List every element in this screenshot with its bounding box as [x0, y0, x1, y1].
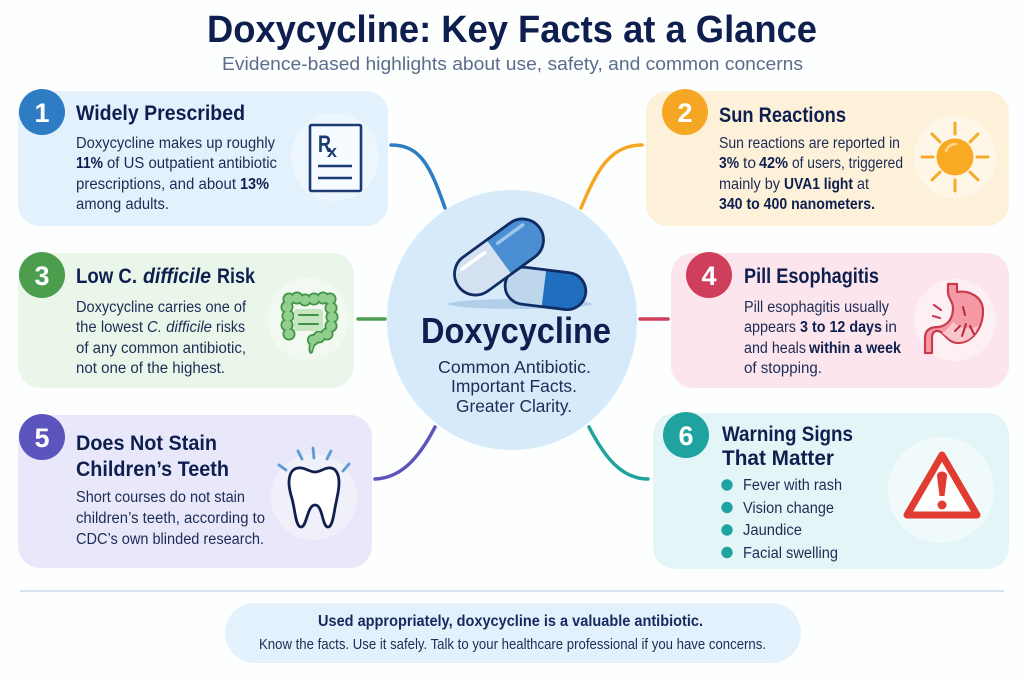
body text: appears	[744, 319, 796, 336]
body text: CDC’s own blinded research.	[76, 531, 264, 548]
icon: capsules	[446, 211, 592, 312]
panel: low C. difficile risk	[18, 252, 354, 388]
body text: in	[885, 319, 897, 336]
body text: C. difficile	[147, 319, 212, 336]
connector: card 3 to centre	[358, 317, 385, 321]
badge 3: 3	[34, 261, 50, 291]
body text: of stopping.	[744, 360, 822, 377]
subtitle: Evidence-based highlights about use, safety, and common concerns	[222, 53, 803, 74]
warning list: Jaundice	[743, 522, 802, 539]
connector: card 1 to centre	[391, 145, 445, 208]
heading	[76, 265, 255, 288]
heading: Warning Signs	[722, 423, 853, 446]
connector: card 2 to centre	[581, 145, 642, 208]
body text: Short courses do not stain	[76, 489, 245, 506]
body text: not one of the highest.	[76, 360, 225, 377]
badge 3	[19, 252, 65, 298]
body text: UVA1 light	[784, 176, 853, 193]
heading	[76, 432, 229, 481]
heading: Does Not Stain	[76, 432, 217, 455]
badge 1	[19, 89, 65, 135]
warning list: Fever with rash	[743, 477, 842, 494]
body text	[719, 135, 903, 213]
heading: Children’s Teeth	[76, 458, 229, 481]
heading: That Matter	[722, 447, 834, 470]
icon: tooth	[271, 448, 357, 540]
body text: and heals	[744, 340, 806, 357]
body text: within a week	[808, 340, 901, 357]
body text: Doxycycline makes up roughly	[76, 135, 275, 152]
panel: sun reactions	[646, 89, 1009, 226]
badge 5: 5	[34, 423, 50, 453]
badge 1: 1	[34, 98, 50, 128]
panel: warning signs that matter	[653, 412, 1009, 569]
footer note: Know the facts. Use it safely. Talk to your healthcare professional if you have concerns.	[259, 637, 766, 653]
body text: risks	[216, 319, 245, 336]
body text: 11%	[76, 155, 103, 172]
body text: Pill esophagitis usually	[744, 299, 889, 316]
hub title: Doxycycline	[421, 310, 611, 351]
body text: to	[743, 155, 756, 172]
body text: children’s teeth, according to	[76, 510, 265, 527]
body text: Sun reactions are reported in	[719, 135, 900, 152]
hub tagline	[438, 357, 591, 416]
body text: 340 to 400 nanometers.	[719, 196, 875, 213]
body text: the lowest	[76, 319, 144, 336]
connector: card 4 to centre	[640, 317, 668, 321]
body text	[744, 299, 901, 377]
hub tagline: Common Antibiotic.	[438, 357, 591, 377]
title: Doxycycline: Key Facts at a Glance	[207, 9, 817, 51]
connector: card 6 to centre	[589, 427, 648, 479]
badge 4	[686, 252, 732, 298]
heading	[722, 423, 853, 470]
body text	[76, 489, 265, 548]
warning list: Vision change	[743, 500, 834, 517]
heading: Widely Prescribed	[76, 102, 245, 125]
icon: prescription: R	[318, 131, 331, 158]
body text: 3 to 12 days	[800, 319, 882, 336]
central hub	[387, 190, 637, 450]
hub tagline: Greater Clarity.	[456, 396, 572, 416]
icon: prescription: x	[327, 142, 338, 161]
badge 6: 6	[678, 421, 694, 451]
icon: prescription	[291, 113, 379, 201]
icon: intestine	[267, 278, 349, 360]
warning list	[721, 477, 842, 562]
body text: of US outpatient antibiotic	[107, 155, 277, 172]
heading: difficile	[143, 265, 211, 288]
panel: pill esophagitis	[671, 252, 1009, 388]
heading: Low C.	[76, 265, 137, 288]
body text	[76, 299, 247, 377]
body text: at	[857, 176, 870, 193]
icon: sun	[914, 116, 996, 198]
connector: card 5 to centre	[375, 427, 435, 479]
icon: stomach	[914, 279, 996, 361]
body text: of users, triggered	[792, 155, 903, 172]
badge 5	[19, 414, 65, 460]
body text: among adults.	[76, 196, 169, 213]
panel: widely prescribed	[18, 89, 388, 226]
body text: of any common antibiotic,	[76, 340, 246, 357]
body text: prescriptions, and about	[76, 176, 237, 193]
badge 4: 4	[701, 261, 717, 291]
badge 2: 2	[677, 98, 693, 128]
footer callout	[225, 603, 801, 663]
heading: Pill Esophagitis	[744, 265, 879, 288]
body text: 42%	[759, 155, 788, 172]
body text: 3%	[719, 155, 739, 172]
icon: warning triangle	[888, 437, 994, 543]
body text: 13%	[240, 176, 269, 193]
footer headline: Used appropriately, doxycycline is a valuable antibiotic.	[318, 613, 703, 630]
heading: Risk	[217, 265, 255, 288]
hub tagline: Important Facts.	[451, 376, 577, 396]
body text: mainly by	[719, 176, 780, 193]
warning list: Facial swelling	[743, 545, 838, 562]
badge 6	[663, 412, 709, 458]
body text: Doxycycline carries one of	[76, 299, 247, 316]
heading: Sun Reactions	[719, 104, 846, 127]
badge 2	[662, 89, 708, 135]
panel: does not stain children's teeth	[18, 414, 372, 568]
body text	[76, 135, 277, 213]
